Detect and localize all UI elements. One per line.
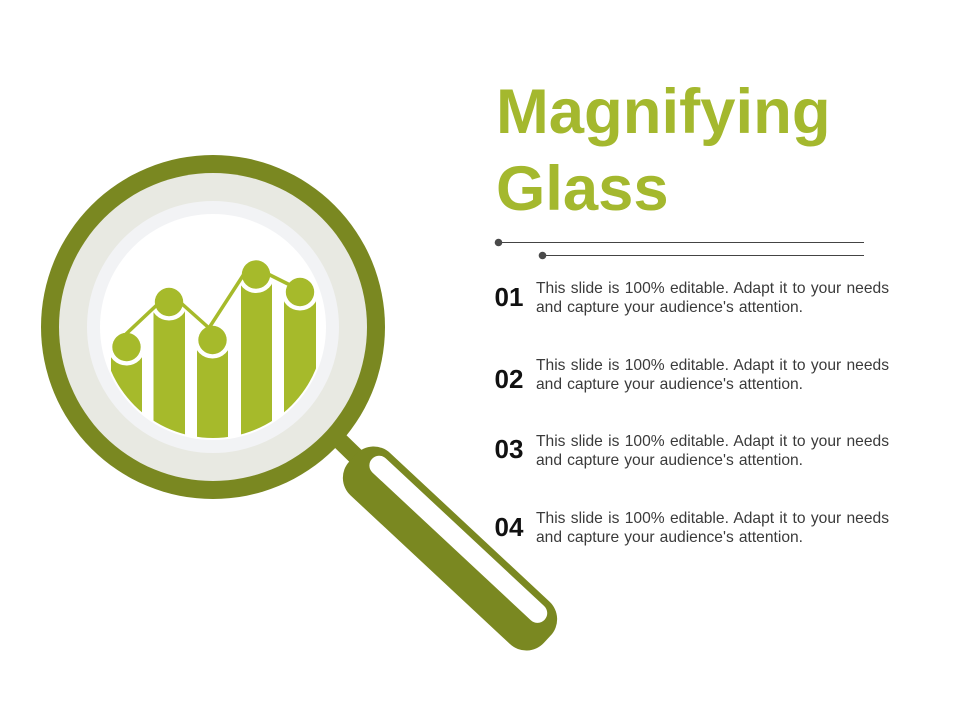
text block 03 (536, 433, 889, 469)
title: Glass (496, 154, 669, 224)
number 01: 01 (494, 282, 523, 312)
bar chart (111, 260, 316, 450)
data points (112, 260, 314, 361)
title: Magnifying (496, 77, 831, 147)
text block 02: This slide is 100% editable. Adapt it to your needs (536, 357, 889, 374)
text block 01: and capture your audience's attention. (536, 299, 803, 316)
text block 01 (536, 280, 889, 316)
text block 02 (536, 357, 889, 393)
number 03: 03 (494, 434, 523, 464)
text block 04: and capture your audience's attention. (536, 529, 803, 546)
bars (111, 284, 316, 438)
number 02: 02 (494, 364, 523, 394)
text block 03: This slide is 100% editable. Adapt it to your needs (536, 433, 889, 450)
text block 01: This slide is 100% editable. Adapt it to your needs (536, 280, 889, 297)
magnifying glass illustration (41, 155, 558, 650)
text block 02: and capture your audience's attention. (536, 376, 803, 393)
title (496, 77, 831, 224)
lens rings (41, 155, 385, 499)
text block 04: This slide is 100% editable. Adapt it to your needs (536, 510, 889, 527)
text block 04 (536, 510, 889, 546)
text block 03: and capture your audience's attention. (536, 452, 803, 469)
trend line (126, 274, 292, 334)
number 04: 04 (494, 512, 523, 542)
handle neck (335, 436, 370, 470)
handle (333, 437, 567, 660)
